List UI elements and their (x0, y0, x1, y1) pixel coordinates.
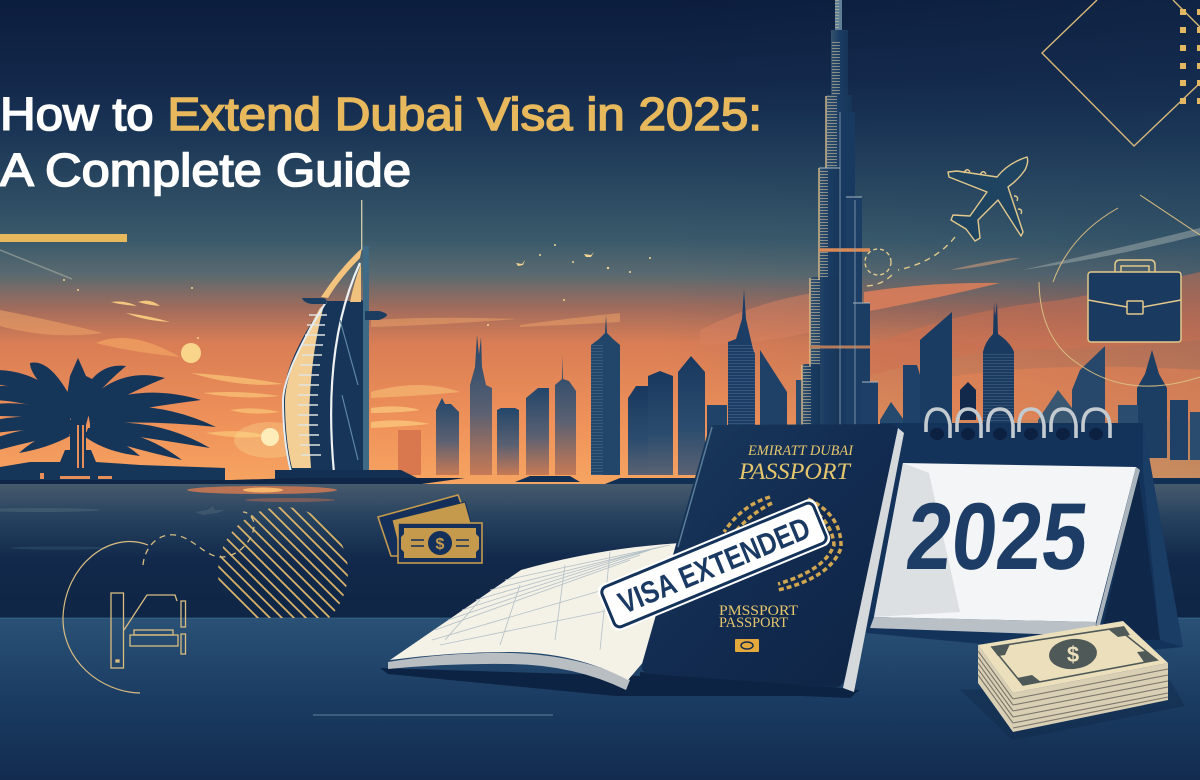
icon: desk device line art (111, 593, 186, 668)
stamp: visa extended: VISA EXTENDED (613, 510, 815, 621)
passport heading: PMSSPORT (719, 603, 798, 619)
background sky (0, 0, 1200, 490)
passport heading: PASSPORT (719, 615, 788, 631)
sun (181, 343, 306, 458)
laurel wreath (724, 497, 841, 590)
birds (63, 244, 651, 339)
passport heading: PASSPORT (738, 459, 852, 484)
distant shore right (515, 476, 1200, 486)
Burj Khalifa tower (802, 0, 878, 468)
passport (640, 424, 904, 698)
passport heading (719, 443, 854, 631)
sea (0, 484, 1200, 620)
passport chip (735, 639, 759, 652)
Burj Al Arab hotel (275, 200, 421, 485)
title line 2: A Complete Guide (0, 144, 411, 196)
sunset clouds (0, 228, 1200, 437)
hatched circle (218, 507, 348, 618)
icon: airplane (948, 157, 1028, 241)
decorative diamond and dots (1042, 0, 1200, 146)
dashed travel path and arc (63, 512, 254, 693)
distant skyline left (398, 289, 804, 475)
open book (380, 543, 860, 696)
shoreline (0, 478, 465, 487)
decorative arcs around briefcase (1039, 195, 1200, 386)
icon: briefcase (1088, 260, 1181, 342)
title underline (0, 234, 127, 242)
passport heading: EMIRATT DUBAI (747, 443, 854, 459)
stack of money (960, 621, 1185, 740)
dashed flight path (865, 237, 955, 286)
stack of money: $ (1067, 642, 1079, 667)
calendar year: 2025 (902, 484, 1093, 590)
skyline right (880, 302, 1200, 460)
title (0, 88, 762, 196)
icon: gold banknotes (378, 495, 482, 563)
icon: gold banknotes: $ (436, 536, 445, 553)
title line 1: How to Extend Dubai Visa in 2025: (0, 88, 762, 140)
calendar (866, 409, 1183, 655)
palm tree landmark (0, 358, 225, 482)
table surface (0, 618, 1200, 780)
